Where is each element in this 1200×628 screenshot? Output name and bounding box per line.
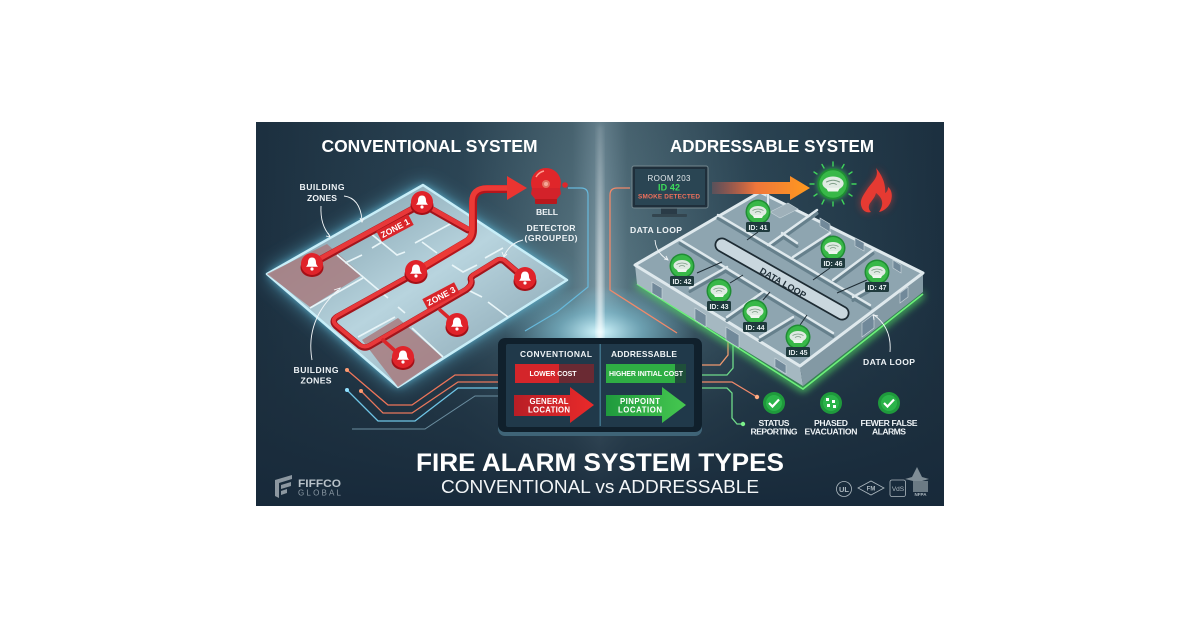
heading: addressable system: ADDRESSABLE SYSTEM [670,136,874,156]
bar higher initial cost [606,364,686,383]
mark FM: FM [867,486,875,492]
page background panel [256,122,944,506]
label: fewer false alarms [860,418,918,436]
bar higher initial cost: HIGHER INITIAL COST [609,371,684,378]
label: building zones bottom: BUILDING [294,365,339,375]
panel: comparison tablet [498,338,702,436]
arrow general location: LOCATION [528,406,570,414]
annotation arrows right [655,240,890,352]
column head addressable: ADDRESSABLE [611,349,677,359]
detector id 45 [786,324,810,357]
panel: addressable building [635,192,923,389]
arrow general location [514,387,594,423]
bar lower cost [515,364,594,383]
detector id 44: ID: 44 [745,325,765,332]
arrow head to bell [507,176,527,200]
detector id 45: ID: 45 [788,350,808,357]
arrow pinpoint location: LOCATION [618,406,662,414]
label: building zones bottom: ZONES [300,376,332,386]
arrow: orange alert [712,176,810,200]
column head conventional: CONVENTIONAL [520,349,592,359]
arrow general location: GENERAL [530,397,569,406]
detector id 41 [746,200,770,232]
building window doors [652,218,908,374]
mark NFPA: NFPA [915,492,927,497]
label: phased evacuation: PHASED [814,418,848,428]
zone 1 tag: ZONE 1 [379,216,411,240]
label: status reporting: STATUS [758,418,790,428]
circuit traces right [610,188,759,426]
detector id 43: ID: 43 [709,304,729,311]
sofa furniture [770,203,798,218]
data loop racetrack: DATA LOOP [758,266,808,300]
icon: detectors conventional [300,191,536,370]
floor walls [310,223,508,357]
detector drop lines [697,232,867,325]
zone 3 tag: ZONE 3 [425,284,457,308]
arrow pinpoint location: PINPOINT [620,397,660,406]
main title: FIRE ALARM SYSTEM TYPES [416,449,784,477]
icon: status check [763,392,785,414]
icon: smoke detector alert [810,162,856,206]
detector id 47 [864,260,890,292]
detector id 47: ID: 47 [867,285,887,292]
label: status reporting: REPORTING [750,426,798,436]
label: bell: BELL [536,207,558,217]
icon: monitor: SMOKE DETECTED [638,194,700,200]
label: building zones top: BUILDING [300,182,345,192]
mark VdS: VdS [892,486,905,493]
label: data loop left: DATA LOOP [630,225,682,235]
shaded zone left [267,244,362,307]
icon: bell [531,168,568,204]
detector id 46: ID: 46 [823,261,843,268]
label: building zones top [300,182,345,203]
label: fewer false alarms: FEWER FALSE [860,418,918,428]
label: building zones bottom [294,365,339,386]
logo: fiffco global: FIFFCO [298,478,341,490]
label: detector grouped: DETECTOR [526,223,576,233]
mark UL: UL [839,485,849,494]
detector id 43 [706,278,732,311]
label: detector grouped: (GROUPED) [524,233,578,243]
label: fewer false alarms: ALARMS [872,426,906,436]
label: data loop right: DATA LOOP [863,357,915,367]
detector id 44 [742,300,768,332]
icon: phased evacuation [820,392,842,414]
data loop racetrack [722,245,842,313]
detector id 42 [670,254,694,286]
heading: conventional system: CONVENTIONAL SYSTEM [322,136,538,156]
icon: flame [861,168,892,212]
panel: conventional floor plan [267,185,567,387]
subtitle: CONVENTIONAL vs ADDRESSABLE [441,477,759,497]
detector id 42: ID: 42 [672,279,692,286]
label: building zones top: ZONES [307,193,337,203]
icon: monitor [632,166,708,217]
bar lower cost: LOWER COST [530,371,577,378]
label: detector grouped [524,223,578,243]
red alarm wiring and arrow to bell [312,188,525,358]
bell wiring trace [525,188,588,331]
icon: monitor: ID 42 [658,182,680,192]
detector id 41: ID: 41 [748,225,768,232]
certification marks [836,467,929,497]
arrow pinpoint location [606,387,686,423]
detector id 46 [820,236,846,268]
circuit traces left [345,368,500,429]
label: phased evacuation [804,418,858,436]
building walls [680,192,883,340]
logo: fiffco global: GLOBAL [298,488,342,498]
icon: monitor: ROOM 203 [648,174,691,183]
logo: fiffco global [275,475,342,498]
label: status reporting [750,418,798,436]
annotation arrows left [311,196,523,360]
label: phased evacuation: EVACUATION [804,426,858,436]
tablet divider [600,344,601,426]
icon: fewer false alarms check [878,392,900,414]
shaded zone bottom [362,318,442,387]
